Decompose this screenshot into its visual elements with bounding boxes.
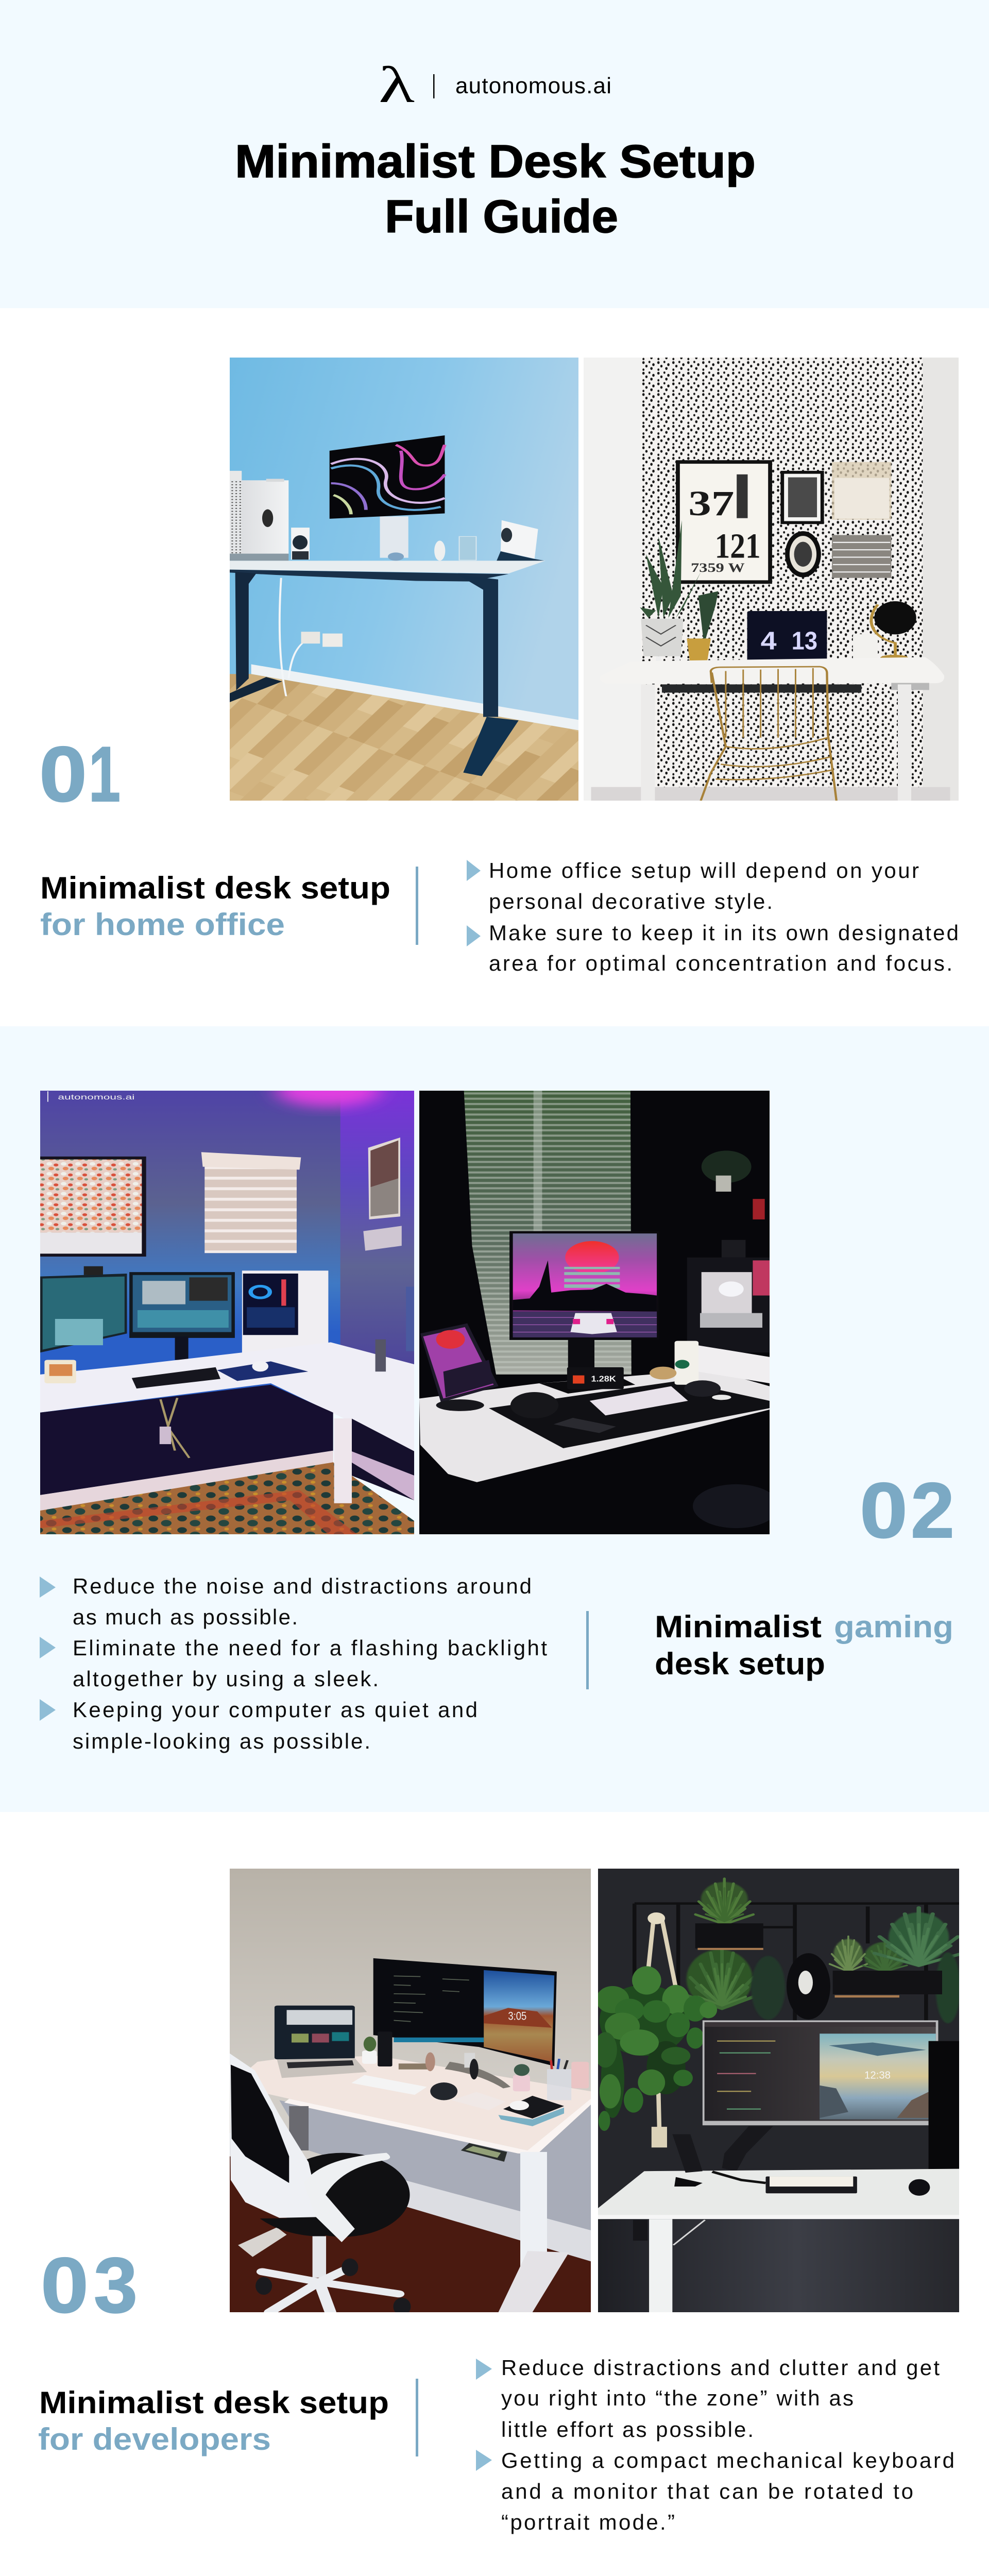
bullet text 2: Getting a compact mechanical keyboard xyxy=(501,2448,954,2472)
bullet text 1: you right into “the zone” with as xyxy=(501,2386,854,2410)
pothos plant xyxy=(594,1966,717,2131)
divider xyxy=(416,2379,418,2456)
panel: section 1 home office xyxy=(0,308,989,1026)
bullet text 3 xyxy=(73,1698,478,1753)
bullet arrow 2 xyxy=(476,2450,492,2471)
bullet text 2 xyxy=(501,2448,954,2534)
photo: dark synthwave desk: 1.28K xyxy=(591,1374,616,1383)
bullet arrow 1 xyxy=(40,1577,56,1598)
photo: white desk with curved monitor: 3:05 xyxy=(508,2010,526,2022)
bullet arrow 1 xyxy=(476,2359,492,2380)
bullet text 2: Make sure to keep it in its own designated xyxy=(489,921,959,945)
heading: section 3: for developers xyxy=(38,2422,271,2456)
logo: divider xyxy=(433,74,435,98)
number 03: 0 xyxy=(41,2242,89,2329)
bullet text 2 xyxy=(73,1636,547,1691)
heading: section 1 xyxy=(40,871,390,942)
bullet arrow 1 xyxy=(467,860,481,881)
photo: dotted wallpaper nook xyxy=(584,358,959,801)
number 02 xyxy=(860,1467,954,1554)
title: Minimalist Desk Setup xyxy=(235,136,756,188)
bullet text 1 xyxy=(489,858,919,913)
bullet text 1: as much as possible. xyxy=(73,1605,298,1629)
bullet text 3: Keeping your computer as quiet and xyxy=(73,1698,478,1722)
photo: dark wall plants desk xyxy=(598,1869,959,2312)
bullet text 1: personal decorative style. xyxy=(489,889,773,913)
logo: lambda mark: λ xyxy=(379,56,415,113)
bullet text 2: and a monitor that can be rotated to xyxy=(501,2479,913,2503)
number 01: 1 xyxy=(89,731,121,818)
number 02: 0 xyxy=(860,1467,908,1554)
logo: wordmark: autonomous.ai xyxy=(455,73,611,98)
panel: section 2 gaming xyxy=(0,1026,989,1812)
title: Full Guide xyxy=(385,191,618,243)
photo: dotted wallpaper nook: 121 xyxy=(715,526,761,566)
heading: section 3 xyxy=(38,2385,389,2456)
heading: section 1: Minimalist desk setup xyxy=(40,871,390,905)
bullet text 1: Home office setup will depend on your xyxy=(489,858,919,883)
photo: dark wall plants desk: 12:38 xyxy=(864,2069,891,2081)
bullet text 2: area for optimal concentration and focus. xyxy=(489,951,952,975)
number 02: 2 xyxy=(911,1467,954,1554)
heading: section 2: Minimalist xyxy=(655,1609,822,1644)
bullet text 2 xyxy=(489,921,959,975)
number 03: 3 xyxy=(94,2242,138,2329)
photo: dotted wallpaper nook: 13 xyxy=(792,626,817,655)
heading: section 3: Minimalist desk setup xyxy=(39,2385,389,2420)
divider xyxy=(416,867,418,945)
photo: purple lit corner desk xyxy=(40,1091,414,1534)
photo: dotted wallpaper nook: 4 xyxy=(761,626,777,655)
bullet text 2: altogether by using a sleek. xyxy=(73,1667,379,1691)
bullet text 1: little effort as possible. xyxy=(501,2417,754,2442)
bullet text 1 xyxy=(501,2355,940,2442)
bullet text 2: “portrait mode.” xyxy=(501,2510,675,2534)
heading: section 2 xyxy=(655,1609,953,1681)
photo: dark synthwave desk xyxy=(419,1091,770,1534)
bullet arrow 3 xyxy=(40,1699,56,1721)
photo: dotted wallpaper nook: 37 xyxy=(688,484,734,523)
photo: white desk with curved monitor xyxy=(230,1869,591,2312)
panel: header xyxy=(0,0,989,308)
photo: blue wall standing desk xyxy=(230,358,578,801)
bullet text 1 xyxy=(73,1574,532,1629)
bullet arrow 2 xyxy=(467,925,481,946)
bullet arrow 2 xyxy=(40,1637,56,1658)
number 01: 0 xyxy=(39,731,87,818)
number 01 xyxy=(39,731,121,818)
heading: section 1: for home office xyxy=(40,907,285,942)
watermark: autonomous.ai xyxy=(58,1093,134,1101)
heading: section 2: desk setup xyxy=(655,1647,825,1681)
divider xyxy=(586,1611,589,1689)
bullet text 3: simple-looking as possible. xyxy=(73,1729,370,1753)
panel: section 3 developers xyxy=(0,1812,989,2566)
title xyxy=(235,136,756,243)
number 03 xyxy=(41,2242,138,2329)
bullet text 1: Reduce the noise and distractions around xyxy=(73,1574,532,1598)
bullet text 1: Reduce distractions and clutter and get xyxy=(501,2355,940,2380)
bullet text 2: Eliminate the need for a flashing backlight xyxy=(73,1636,547,1660)
heading: section 2: gaming xyxy=(834,1609,953,1644)
photo: dotted wallpaper nook: 7359 W xyxy=(691,561,745,575)
